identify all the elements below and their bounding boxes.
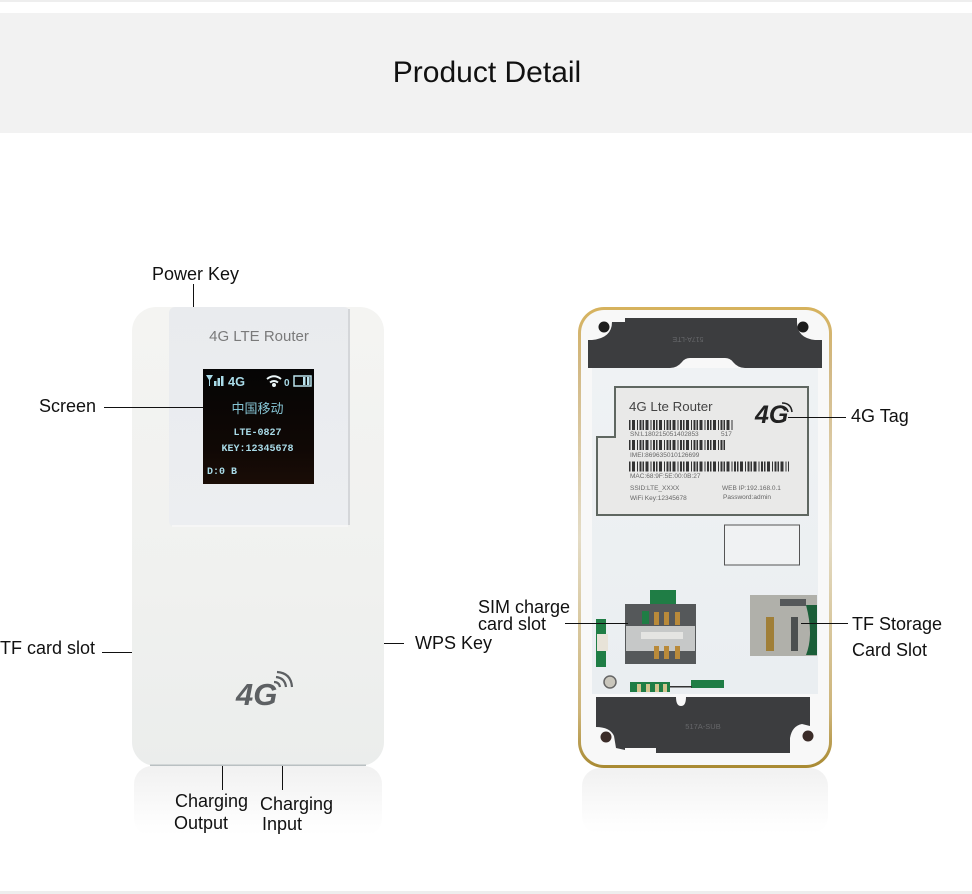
- signal icon: [206, 375, 224, 386]
- SIM slot: [625, 590, 696, 664]
- label 4G logo: 4G: [754, 401, 788, 429]
- router rear view: [578, 307, 832, 768]
- callout: WPS Key: WPS Key: [415, 633, 492, 653]
- callout: TF Storage Card Slot: [801, 614, 942, 660]
- callout: Charging Output: Output: [174, 813, 228, 833]
- rear label: Password:admin: [723, 494, 771, 501]
- callout: Charging Input: [260, 766, 333, 834]
- front device reflection: [134, 766, 382, 836]
- callout: TF Storage Card Slot: Card Slot: [852, 640, 927, 660]
- rear label: SN:L180215051402853: [630, 431, 699, 438]
- top screw right: [798, 322, 808, 332]
- callout: Charging Output: Charging: [175, 791, 248, 811]
- rear label: 517: [721, 431, 732, 438]
- antenna connector: [604, 676, 616, 688]
- barcodes: [629, 425, 789, 466]
- callout: Charging Output: [174, 766, 248, 833]
- 4G logo: 4G: [235, 677, 277, 712]
- screen: [203, 369, 314, 484]
- rear label: 4G Lte Router: [629, 399, 713, 414]
- top screw left: [598, 322, 610, 332]
- callout: SIM charge card slot: SIM charge: [478, 597, 570, 617]
- rear label: MAC:68:9F:5E:00:0B:27: [630, 473, 701, 480]
- callout: Charging Input: Input: [262, 814, 302, 834]
- top battery contact: [588, 318, 822, 368]
- bottom screw right: [802, 730, 814, 742]
- rear label: IMEI:869635010126699: [630, 452, 700, 459]
- rear label: [597, 387, 808, 515]
- TF card slot: [750, 595, 817, 656]
- callout: SIM charge card slot: card slot: [478, 614, 546, 634]
- rear label: WEB IP:192.168.0.1: [722, 485, 781, 492]
- side connector: [596, 619, 608, 667]
- wifi icon: [267, 376, 281, 386]
- 4G logo: [235, 672, 292, 712]
- small rectangle window: [724, 525, 800, 565]
- rear label: SSID:LTE_XXXX: [630, 485, 680, 492]
- callout: 4G Tag: [788, 406, 909, 426]
- title: Product Detail: [393, 56, 581, 89]
- screen: D:0 B: [207, 467, 237, 478]
- bottom battery contact: [596, 697, 810, 753]
- screen: 0: [284, 378, 290, 389]
- rear label: WiFi Key:12345678: [630, 495, 687, 502]
- inner tray: [592, 368, 818, 694]
- product name: 4G LTE Router: [209, 328, 309, 345]
- screen: 4G: [228, 375, 245, 389]
- rear device reflection: [582, 768, 828, 834]
- bottom screw left: [600, 732, 612, 742]
- callout: Screen: Screen: [39, 396, 96, 416]
- callout: Charging Input: Charging: [260, 794, 333, 814]
- screen: 中国移动: [231, 401, 284, 416]
- router front view: [132, 307, 384, 766]
- screen: KEY:12345678: [221, 444, 294, 455]
- callout: TF card slot: TF card slot: [0, 638, 95, 658]
- top panel: [169, 307, 350, 527]
- callout: 4G Tag: 4G Tag: [851, 406, 909, 426]
- callout: TF Storage Card Slot: TF Storage: [852, 614, 942, 634]
- callout: Power Key: [152, 264, 239, 307]
- callout: SIM charge card slot: [478, 597, 628, 634]
- top code: 517A-LTE: [672, 335, 704, 342]
- bottom code: 517A-SUB: [685, 722, 721, 731]
- callout: Power Key: Power Key: [152, 264, 239, 284]
- battery icon: [294, 376, 311, 386]
- lower PCB strip: [630, 680, 724, 692]
- header band: [0, 13, 972, 133]
- screen: LTE-0827: [233, 428, 282, 439]
